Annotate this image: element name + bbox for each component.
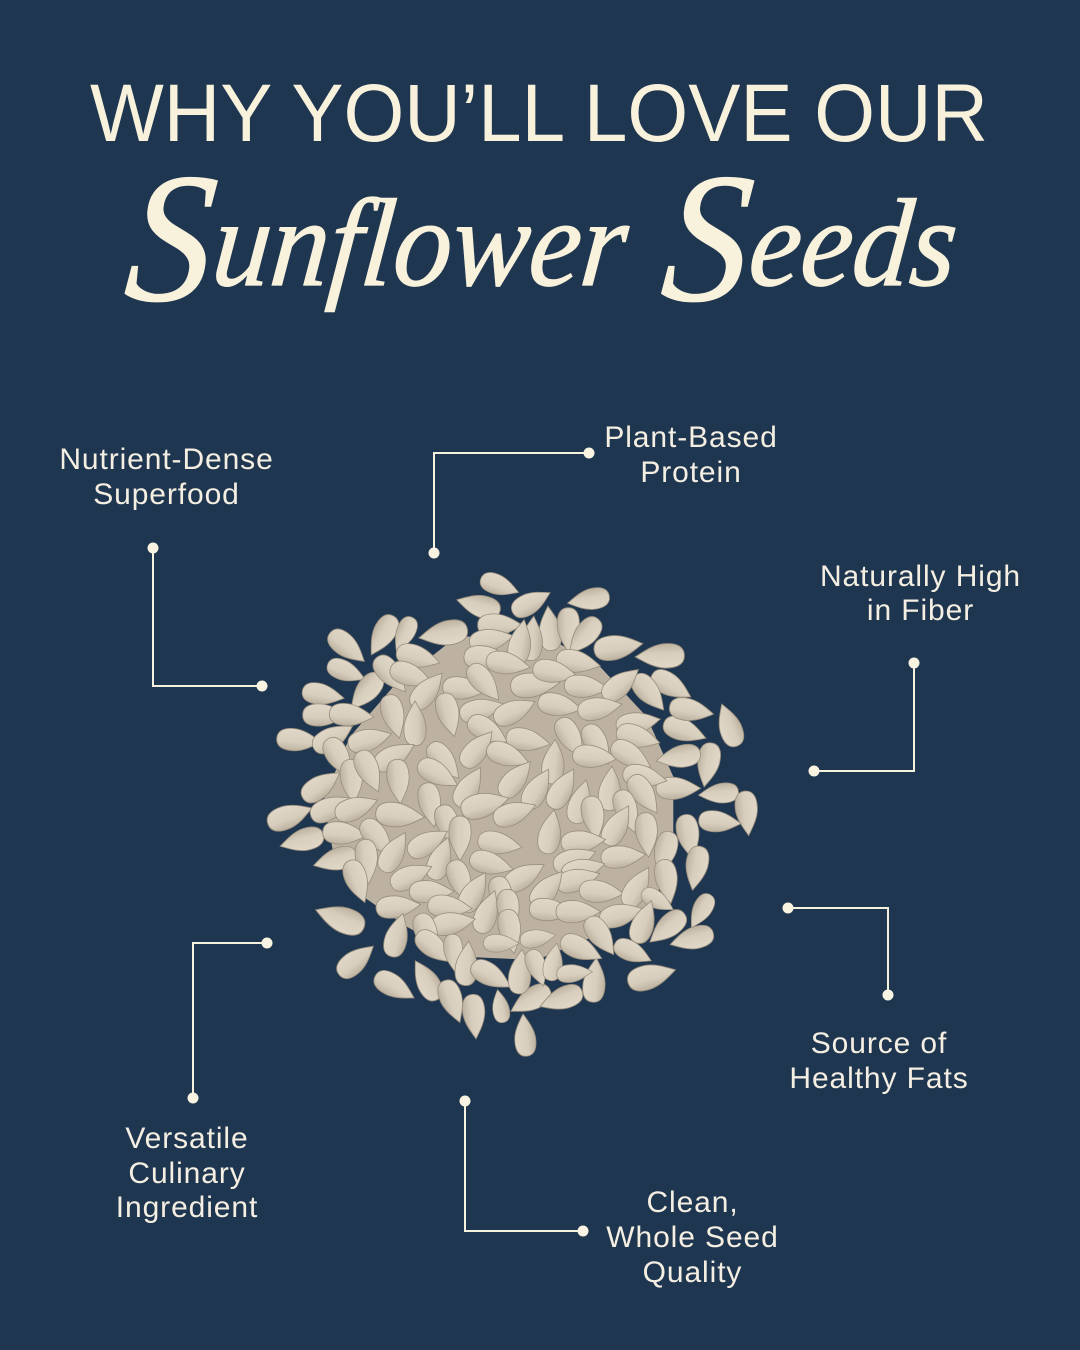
label: in Fiber [867,594,974,627]
label: Quality [643,1256,742,1289]
title: sunflower seeds: S [655,135,761,340]
label: Source of [811,1027,947,1060]
callout: source of healthy fats [782,902,969,1095]
label: Naturally High [820,560,1021,593]
callout: naturally high in fiber [808,560,1021,776]
title: sunflower seeds: S [118,135,225,340]
title: sunflower seeds: eeds [744,174,964,313]
label: Clean, [646,1186,739,1219]
title: why you'll love our: WHY YOU’LL LOVE OUR [90,68,988,159]
callout: clean, whole seed quality [460,1096,779,1289]
label: Whole Seed [606,1221,779,1254]
connector [460,1096,588,1236]
seed pile [264,569,760,1057]
label: Healthy Fats [789,1062,969,1095]
title: sunflower seeds: unflower [207,174,635,313]
callout: plant-based protein [428,421,778,558]
connector [782,902,894,1000]
label: Nutrient-Dense [59,443,274,476]
label: Plant-Based [604,421,778,454]
label: Protein [640,456,742,489]
label: Superfood [93,478,240,511]
connector [188,938,272,1104]
connector [808,658,920,776]
label: Ingredient [116,1191,258,1224]
label: Versatile [125,1122,249,1155]
callout: nutrient-dense superfood [59,443,274,692]
connector [428,448,594,558]
callout: versatile culinary ingredient [116,938,272,1224]
label: Culinary [128,1157,246,1190]
connector [148,542,268,692]
